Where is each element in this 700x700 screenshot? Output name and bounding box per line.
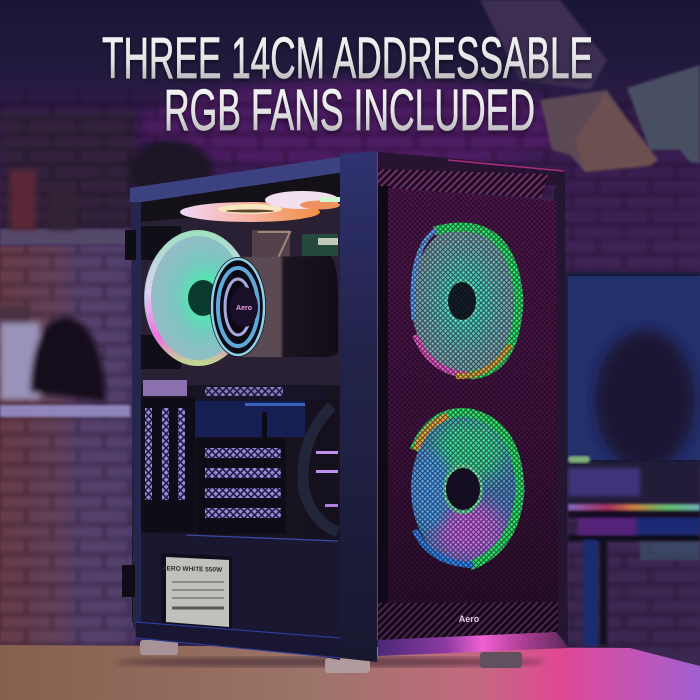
table surface bbox=[0, 645, 700, 700]
background: left shelves with figures bbox=[0, 140, 212, 417]
case interior bbox=[132, 158, 340, 660]
top ring lights bbox=[180, 191, 340, 222]
top front vent bbox=[378, 169, 548, 198]
psu shroud bbox=[141, 533, 340, 642]
front lower vent with logo bbox=[378, 602, 558, 640]
interior top right components bbox=[252, 230, 338, 258]
case right edge and inner strip bbox=[554, 172, 568, 645]
pc case bbox=[122, 151, 568, 673]
pci expansion slots bbox=[141, 398, 286, 534]
front lower vent with logo: Aero bbox=[459, 614, 480, 624]
front pink base strip bbox=[378, 632, 568, 656]
top fans housing bbox=[141, 172, 340, 222]
motherboard parts bbox=[143, 380, 338, 540]
lower front rgb fan bbox=[410, 412, 521, 566]
top frame bar bbox=[130, 156, 345, 202]
interior upper backplate bbox=[141, 204, 340, 385]
aio pump block bbox=[210, 256, 338, 357]
background: wall monitor bbox=[566, 272, 700, 512]
title bbox=[102, 26, 593, 143]
background: glowing hexagon wall lights bbox=[480, 0, 700, 172]
background: desk with rgb keyboard bbox=[568, 504, 700, 646]
case bottom rail bbox=[136, 622, 340, 658]
aio pump block: Aero bbox=[236, 305, 252, 312]
psu label: AERO WHITE 550W bbox=[162, 565, 223, 574]
front vertical pillar bbox=[340, 151, 377, 662]
case top cap bbox=[378, 152, 565, 186]
case hinges bbox=[122, 230, 136, 597]
rear rgb fan bbox=[144, 231, 252, 365]
left rear frame bbox=[131, 188, 141, 640]
psu label bbox=[161, 553, 232, 629]
rear fan mounting corners bbox=[141, 226, 181, 369]
front mesh panel bbox=[388, 188, 558, 603]
case feet bbox=[140, 640, 522, 673]
upper front rgb fan bbox=[411, 225, 519, 376]
mesh overlay bbox=[388, 188, 558, 603]
